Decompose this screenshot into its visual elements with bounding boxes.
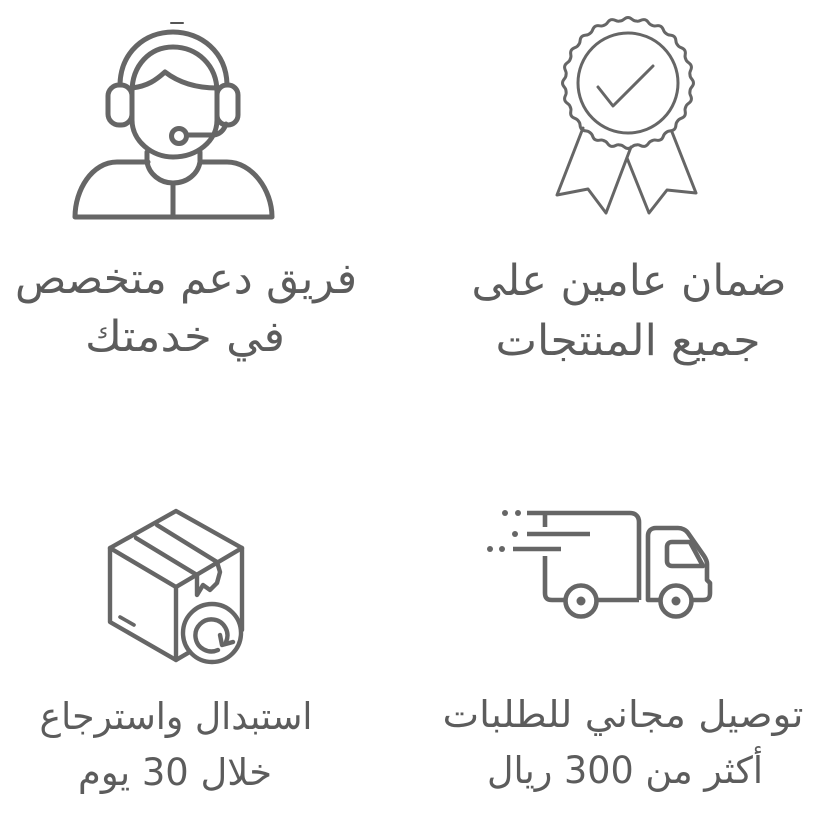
icon: award ribbon with check mark — [557, 18, 696, 213]
icon: support agent with headset — [75, 23, 272, 217]
text: exchange caption: استبدال واسترجاع — [40, 695, 312, 738]
panel: exchange and returns — [40, 511, 312, 794]
panel: free delivery — [442, 510, 804, 792]
text: exchange caption: خلال 30 يوم — [78, 751, 272, 794]
text: support team caption: فريق دعم متخصص — [15, 254, 357, 304]
text: support team caption: في خدمتك — [85, 312, 285, 362]
text: warranty caption — [472, 256, 786, 366]
text: exchange caption — [40, 695, 312, 794]
text: warranty caption: ضمان عامين على — [472, 256, 786, 306]
text: delivery caption: أكثر من 300 ريال — [487, 746, 763, 792]
text: warranty caption: جميع المنتجات — [496, 316, 760, 366]
icon: parcel box with return arrow — [110, 511, 242, 662]
text: delivery caption: توصيل مجاني للطلبات — [442, 693, 804, 736]
text: support team caption — [15, 254, 357, 362]
icon: delivery truck with speed lines — [487, 510, 710, 616]
text: delivery caption — [442, 693, 804, 792]
panel: warranty — [472, 18, 786, 366]
panel: support team — [15, 23, 357, 362]
